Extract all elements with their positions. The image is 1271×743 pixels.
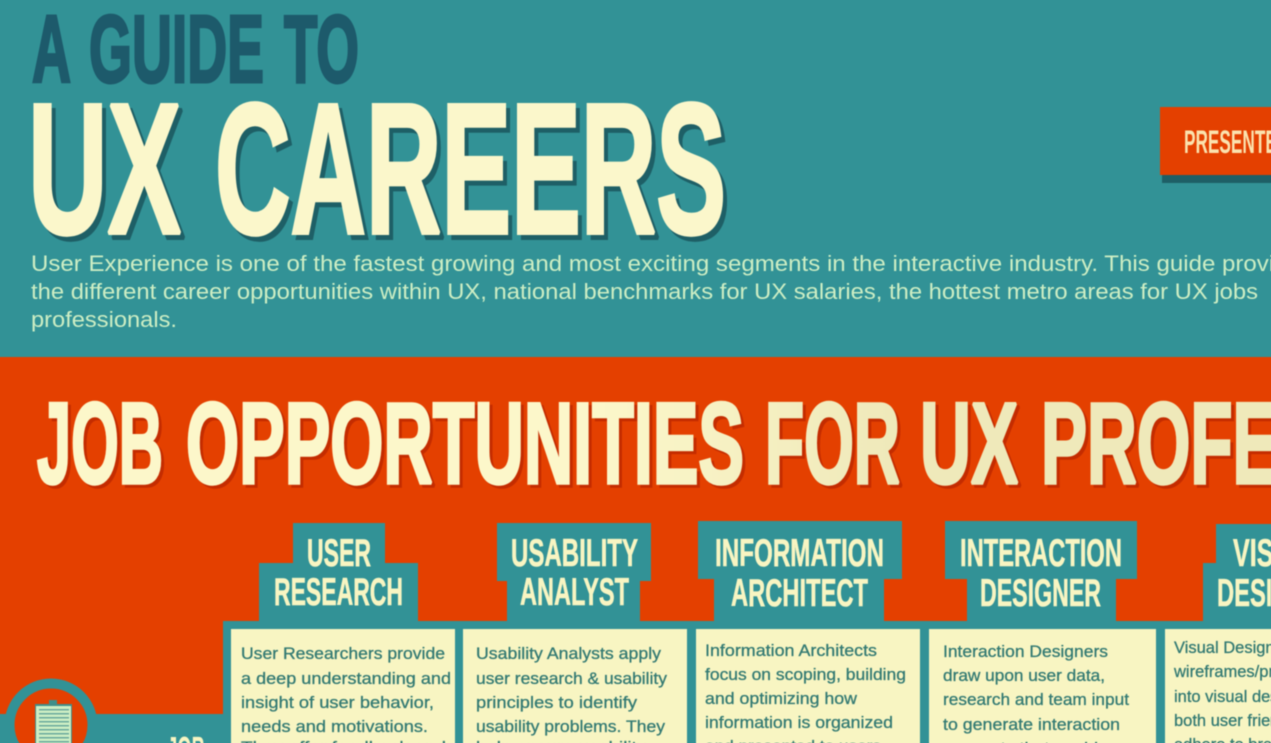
title: UX Careers xyxy=(28,66,726,273)
icon: clipboard in circle xyxy=(10,684,92,743)
job tab: information architect xyxy=(698,521,902,622)
job tab: interaction designer: INTERACTION xyxy=(960,532,1122,575)
title: UX Careers: UX xyxy=(28,66,181,273)
intro paragraph xyxy=(31,251,1271,332)
badge: presented by xyxy=(1160,107,1271,183)
card frame: teal backing xyxy=(0,621,1271,743)
card: usability analyst: usability problems. They xyxy=(476,718,666,736)
card: interaction designer: draw upon user data, xyxy=(943,667,1105,685)
job tab: interaction designer xyxy=(945,521,1137,622)
job tab: information architect: INFORMATION xyxy=(715,532,884,575)
card: interaction designer: Interaction Designers xyxy=(943,643,1108,661)
title: UX Careers: CAREERS xyxy=(215,66,726,273)
job tab: user research: USER xyxy=(307,532,371,575)
card: user research xyxy=(231,629,455,743)
job tab: information architect: ARCHITECT xyxy=(731,572,868,615)
card: information architect: and optimizing how xyxy=(705,690,857,708)
card: usability analyst: user research & usability xyxy=(476,670,668,688)
intro paragraph: professionals. xyxy=(31,307,177,332)
card: user research: a deep understanding and xyxy=(241,670,451,688)
heading: Job Opportunities for UX Professionals: OPPORTUNITIES xyxy=(186,380,744,508)
panel: job opportunities xyxy=(0,357,1271,743)
job tab: user research xyxy=(259,523,418,622)
card: interaction designer xyxy=(929,629,1156,743)
job tab: interaction designer: DESIGNER xyxy=(980,572,1101,615)
card: information architect xyxy=(696,629,920,743)
job tab: usability analyst: USABILITY xyxy=(511,532,638,575)
heading: Job Opportunities for UX Professionals: UX xyxy=(920,380,1018,508)
job tab: visual designer xyxy=(1203,524,1271,622)
heading: Job Opportunities for UX Professionals: FOR xyxy=(765,380,900,508)
card: user research: User Researchers provide xyxy=(241,645,445,663)
heading: Job Opportunities for UX Professionals: JOB xyxy=(37,380,163,508)
intro paragraph: the different career opportunities within UX, national benchmarks for UX salaries, the hottest metro areas for UX jobs xyxy=(31,279,1258,304)
card: information architect: Information Architects xyxy=(705,642,877,660)
card: user research: insight of user behavior, xyxy=(241,694,434,712)
intro paragraph: User Experience is one of the fastest growing and most exciting segments in the interactive industry. This guide provides xyxy=(31,251,1271,276)
job tab: usability analyst xyxy=(497,523,651,622)
job tab: usability analyst: ANALYST xyxy=(520,571,629,614)
card: usability analyst xyxy=(463,629,687,743)
job tab: user research: RESEARCH xyxy=(274,571,403,614)
card: usability analyst: principles to identify xyxy=(476,694,638,712)
card: visual designer xyxy=(1165,629,1271,743)
panel: header xyxy=(0,0,1271,357)
card: interaction designer: research and team input xyxy=(943,691,1129,709)
card: interaction designer: to generate interaction xyxy=(943,716,1120,734)
card: user research: needs and motivations. xyxy=(241,718,428,736)
card: information architect: focus on scoping, building xyxy=(705,666,906,684)
card: information architect: information is organized xyxy=(705,714,893,732)
card: usability analyst: Usability Analysts apply xyxy=(476,645,662,663)
